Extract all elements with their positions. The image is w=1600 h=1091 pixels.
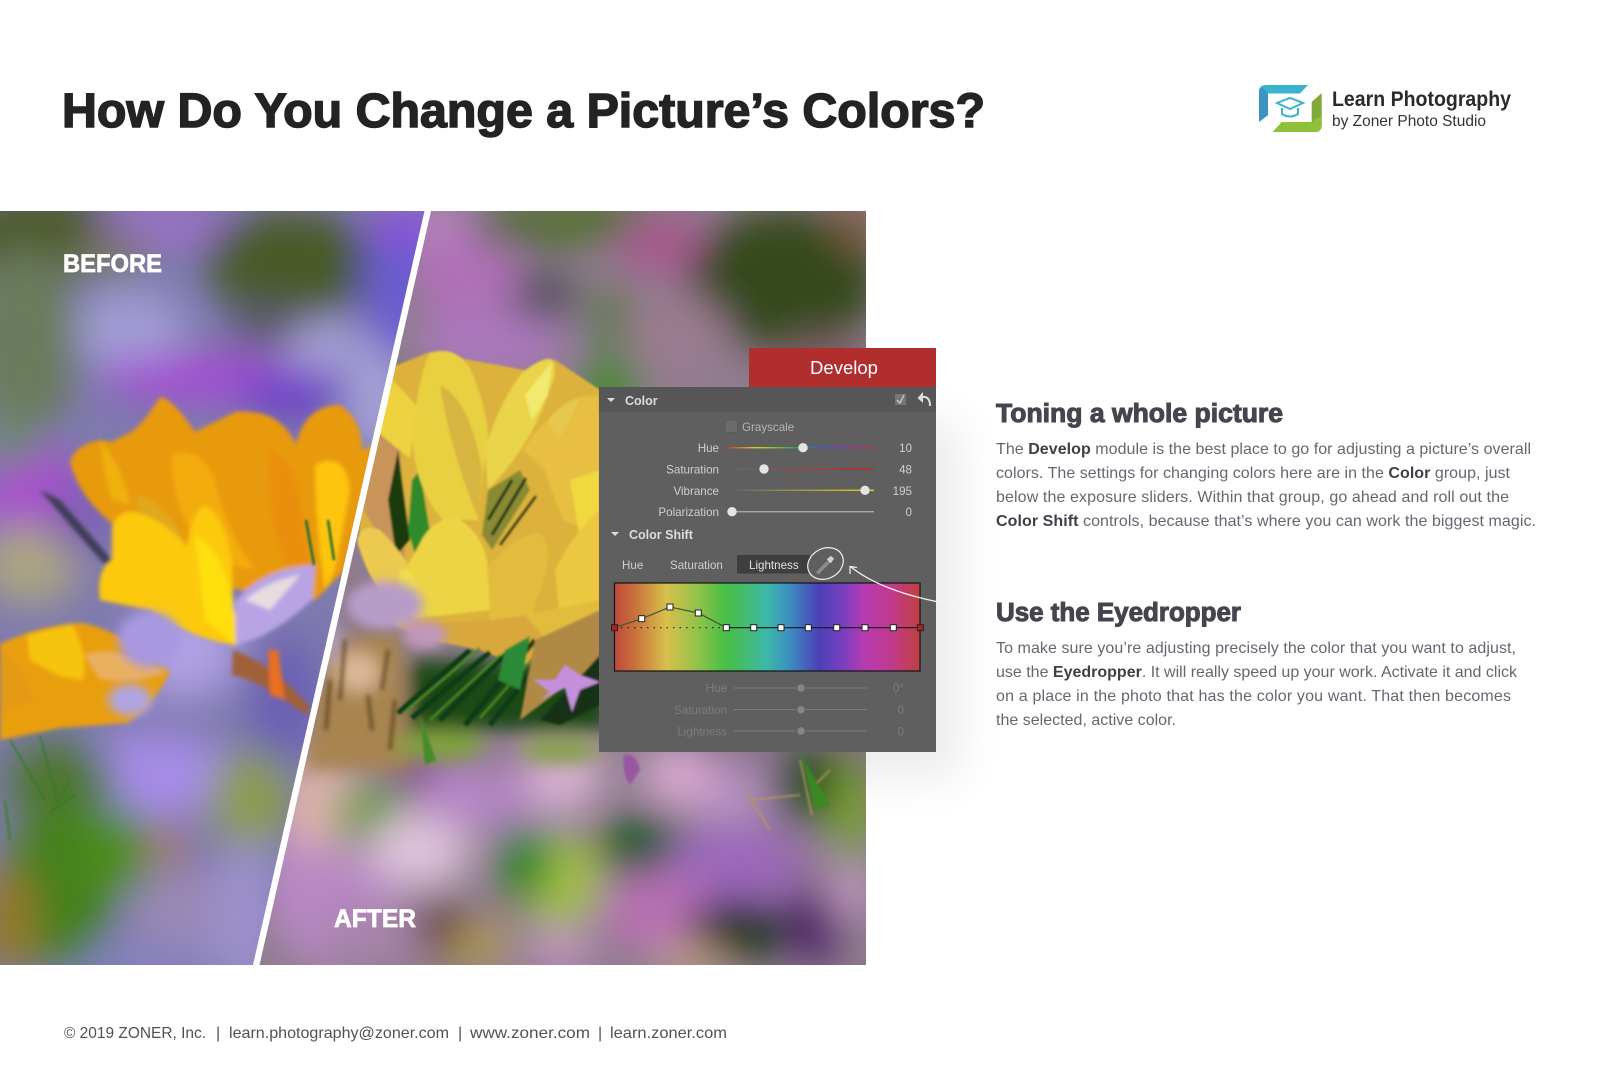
slider: hue <box>698 442 912 455</box>
panel shadow <box>700 420 962 780</box>
checkbox: grayscale: Grayscale <box>742 421 794 434</box>
body text: toning <box>996 441 1536 530</box>
tabs: hue saturation lightness: Lightness <box>749 559 799 572</box>
photo: before and after split <box>0 193 880 990</box>
body text: eyedropper: the selected, active color. <box>996 712 1176 729</box>
logo text: Learn Photography <box>1332 87 1511 111</box>
panel: color settings <box>599 387 936 752</box>
footer: learn.zoner.com <box>610 1025 727 1042</box>
title: How Do You Change a Picture’s Colors? <box>62 85 985 138</box>
slider: disabled lightness: 0 <box>898 726 904 738</box>
body text: toning: below the exposure sliders. Within that group, go ahead and roll out the <box>996 489 1509 506</box>
label: before: BEFORE <box>63 250 162 278</box>
tabs: hue saturation lightness: Saturation <box>670 559 723 572</box>
slider: disabled lightness: Lightness <box>677 726 727 738</box>
body text: eyedropper: on a place in the photo that has the color you want. That then becomes <box>996 688 1511 705</box>
icon: eyedropper <box>802 542 849 585</box>
slider: saturation: Saturation <box>666 464 719 476</box>
slider: disabled lightness <box>677 726 904 738</box>
panel: develop tab <box>749 348 936 387</box>
panel header: color <box>599 387 936 412</box>
heading: eyedropper: Use the Eyedropper <box>996 599 1241 627</box>
body text: toning: The Develop module is the best place to go for adjusting a picture’s overall <box>996 441 1531 458</box>
label: after: AFTER <box>334 905 416 933</box>
footer: www.zoner.com <box>469 1025 590 1042</box>
icon: logo mark <box>1259 85 1322 132</box>
panel header: color: Color <box>625 394 658 408</box>
slider: vibrance: 195 <box>893 485 912 498</box>
footer <box>64 1025 727 1042</box>
footer: | <box>598 1025 602 1042</box>
slider: hue: 10 <box>899 442 912 455</box>
slider: disabled saturation: 0 <box>898 704 904 717</box>
heading: color shift: Color Shift <box>629 528 694 542</box>
body text: toning: Color Shift controls, because that’s where you can work the biggest magic. <box>996 513 1536 530</box>
chart: color shift curve <box>612 583 923 671</box>
body text: toning: colors. The settings for changing colors here are in the Color group, just <box>996 465 1511 482</box>
photo: before side <box>0 211 424 965</box>
footer: | <box>216 1025 220 1042</box>
tabs: hue saturation lightness <box>622 555 810 574</box>
body text: eyedropper <box>996 640 1518 729</box>
text block: use the eyedropper <box>996 599 1518 729</box>
body text: eyedropper: use the Eyedropper. It will really speed up your work. Activate it and click <box>996 664 1518 681</box>
slider: hue: Hue <box>698 442 719 455</box>
slider: saturation: 48 <box>899 464 912 476</box>
logo: Learn Photography <box>1259 85 1511 132</box>
slider: disabled saturation <box>674 704 904 717</box>
divider line <box>253 211 431 965</box>
slider: vibrance <box>673 485 912 498</box>
slider: vibrance: Vibrance <box>673 485 719 498</box>
heading: toning: Toning a whole picture <box>996 400 1283 428</box>
slider: polarization: Polarization <box>658 506 719 519</box>
slider: disabled hue: Hue <box>706 682 727 695</box>
arrow: to eyedropper <box>850 566 968 607</box>
footer: learn.photography@zoner.com <box>229 1025 449 1042</box>
slider: saturation <box>666 464 912 476</box>
slider: disabled hue: 0° <box>893 682 904 695</box>
footer: | <box>458 1025 462 1042</box>
slider: polarization <box>658 506 912 519</box>
slider: polarization: 0 <box>906 506 912 519</box>
panel: develop tab: Develop <box>810 357 878 378</box>
body text: eyedropper: To make sure you’re adjusting precisely the color that you want to adjust, <box>996 640 1516 657</box>
tabs: hue saturation lightness: Hue <box>622 559 643 572</box>
text block: toning a whole picture <box>996 400 1536 530</box>
photo: after side <box>250 198 880 975</box>
logo: Learn Photography: by Zoner Photo Studio <box>1332 113 1486 130</box>
slider: disabled hue <box>706 682 904 695</box>
slider: disabled saturation: Saturation <box>674 704 727 717</box>
footer: © 2019 ZONER, Inc. <box>64 1025 206 1042</box>
